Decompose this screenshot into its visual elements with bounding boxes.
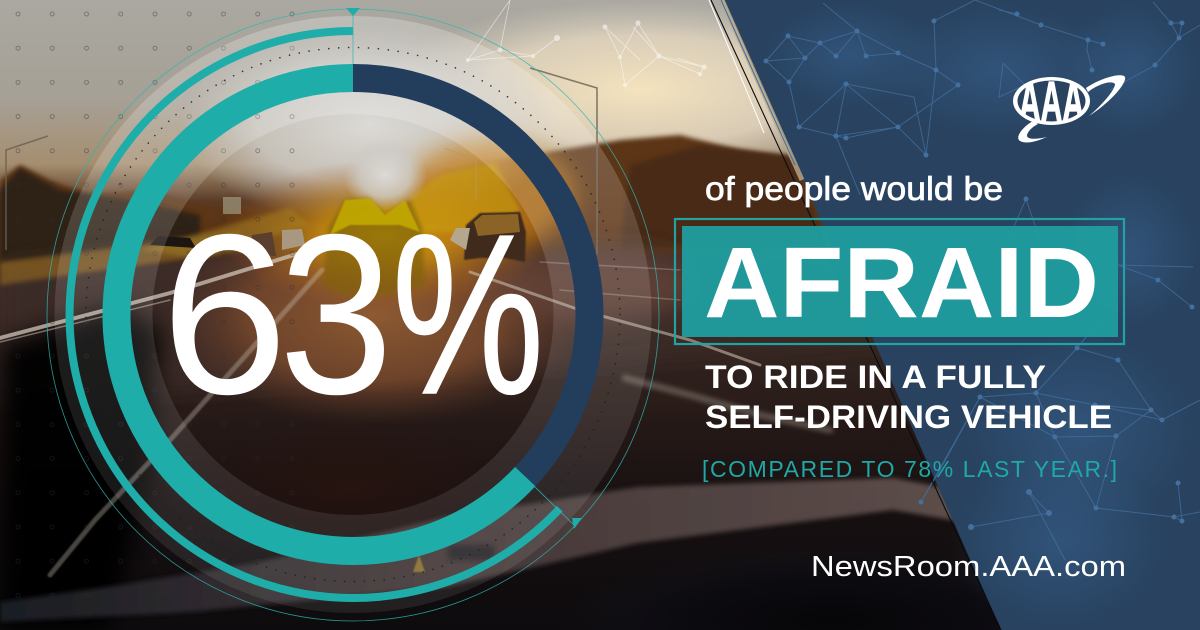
thin outer ring [47,9,659,621]
diagonal edge stripes [709,0,1001,630]
comparison note: [COMPARED TO 78% LAST YEAR.] [702,456,1117,482]
subheading: SELF-DRIVING VEHICLE [705,399,1112,435]
SUV right [464,212,526,262]
photo network overlay [466,0,706,87]
big percentage: 6 [161,188,288,442]
car hood [0,478,1010,622]
box border [675,219,1124,344]
teal outer arc 63% [70,31,560,598]
subheading [705,359,1112,435]
box fill [682,226,1118,337]
road sign [223,197,241,214]
end tick marker [535,487,582,529]
big percentage: 3 [279,188,393,442]
big percentage: % [392,188,544,442]
top tick marker [346,8,360,64]
road surfaces [0,238,900,400]
logo oval [1013,77,1090,125]
dotted ring [86,48,620,582]
subheading: TO RIDE IN A FULLY [705,359,1046,395]
AFRAID callout box [675,219,1124,344]
guard rail glow [0,232,245,285]
navy arc 37% [353,78,589,476]
source URL: NewsRoom.AAA.com [811,551,1126,583]
lower dark area [560,510,1001,630]
right navy panel [724,0,1200,630]
big percentage [161,188,544,442]
tree line [0,135,830,270]
road lines [0,250,830,575]
network lines [766,0,1200,560]
teal main arc 63% [116,78,525,551]
small cars [250,232,276,256]
dot grid [0,0,310,612]
network nodes [764,12,1194,530]
center car [323,198,425,295]
sun glow [220,160,550,310]
logo swoosh [1018,75,1125,142]
translucent outer band [104,65,602,564]
lead-in text: of people would be [705,170,1003,207]
sky haze [180,25,560,225]
panel glow [760,0,1200,630]
street lamps [6,68,597,255]
logo letters: AAA [1019,70,1084,134]
circular gauge [47,8,659,621]
AAA logo [1013,70,1125,142]
AFRAID word: AFRAID [704,227,1099,339]
